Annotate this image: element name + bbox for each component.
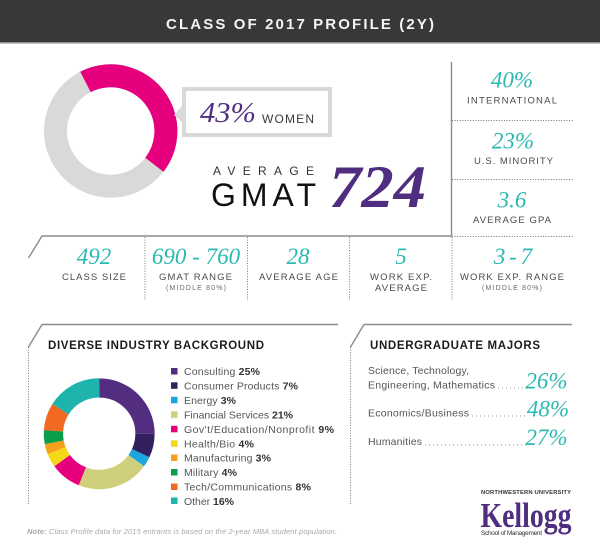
donut chart: industry mix [53,388,145,479]
average GMAT: 724 [329,154,426,220]
average GMAT: GMAT [211,177,316,213]
stat: average GPA: 3.6 [497,188,527,212]
legend: industries: Health/Bio 4% [184,438,255,450]
stat: GMAT range: GMAT RANGE [159,272,232,283]
panel: diverse industry background [28,324,338,508]
stat: work experience range [460,244,564,292]
stat: average age: AVERAGE AGE [259,272,338,283]
major: STEM: Science, Technology, [368,365,469,377]
legend: industries: Tech/Communications 8% [184,482,312,494]
stat: work experience average: 5 [395,244,407,269]
callout: 43% women: 43% [200,97,256,129]
stat: class size: CLASS SIZE [62,272,126,283]
stat: GMAT range [152,244,241,292]
average GMAT: AVERAGE [213,164,314,178]
major: STEM: Engineering, Mathematics [368,380,495,392]
stat: average GPA: AVERAGE GPA [473,215,552,226]
major: humanities: 27% [525,425,568,450]
stat: work experience average: WORK EXP. [370,272,432,283]
stat: average age: 28 [286,244,310,269]
legend: industries: Financial Services 21% [184,410,294,422]
major: economics and business: 48% [527,396,569,422]
legend: industries: Energy 3% [184,395,237,407]
stat: international: 40% [491,68,533,92]
legend: industries: Manufacturing 3% [184,452,272,464]
stat: work experience range: 3 - 7 [493,244,534,269]
stat column dividers [145,120,573,300]
stat: average GPA [473,188,552,226]
stat: average age [259,244,338,283]
major: STEM [368,365,568,394]
panel: undergraduate majors [350,324,572,505]
stat: U.S. minority [474,128,554,167]
header banner [0,0,600,44]
panel heading: industry: DIVERSE INDUSTRY BACKGROUND [48,340,264,352]
average GMAT [211,154,426,220]
stat: U.S. minority: U.S. MINORITY [474,156,554,167]
stat: work experience average [370,244,432,294]
legend: industries [171,366,335,508]
callout: 43% women: WOMEN [262,112,314,126]
frame rule: top section [28,62,452,258]
stat: class size [62,244,126,283]
logo: Kellogg: Kellogg [480,496,572,535]
stat: work experience range: WORK EXP. RANGE [460,272,564,283]
footnote: Note: Class Profile data for 2015 entrants is based on the 2-year MBA student population. [27,527,337,536]
stat: U.S. minority: 23% [492,128,534,154]
callout: 43% women [174,89,330,135]
logo: Kellogg [480,490,572,537]
major: economics and business [368,396,569,422]
stat: GMAT range: (MIDDLE 80%) [166,285,226,292]
major: STEM: 26% [525,368,568,394]
major: humanities [368,425,568,450]
legend: industries: Consulting 25% [184,366,261,378]
panel heading: majors: UNDERGRADUATE MAJORS [370,340,540,352]
stat: work experience average: AVERAGE [375,283,427,294]
major: economics and business: Economics/Business [368,408,469,420]
stat: GMAT range: 690 - 760 [152,244,241,269]
legend: industries: Other 16% [184,496,235,508]
legend: industries: Military 4% [184,467,238,479]
stat: international [467,68,557,106]
logo: Kellogg: NORTHWESTERN UNIVERSITY [481,490,571,496]
legend: industries: Consumer Products 7% [184,380,299,392]
donut chart: women share [36,57,185,205]
stat: work experience range: (MIDDLE 80%) [482,285,542,292]
major: humanities: Humanities [368,436,422,448]
stat: class size: 492 [77,244,111,269]
stat: international: INTERNATIONAL [467,96,557,106]
title: CLASS OF 2017 PROFILE (2Y) [166,16,434,33]
logo: Kellogg: School of Management [481,530,542,537]
legend: industries: Gov't/Education/Nonprofit 9% [184,424,335,436]
